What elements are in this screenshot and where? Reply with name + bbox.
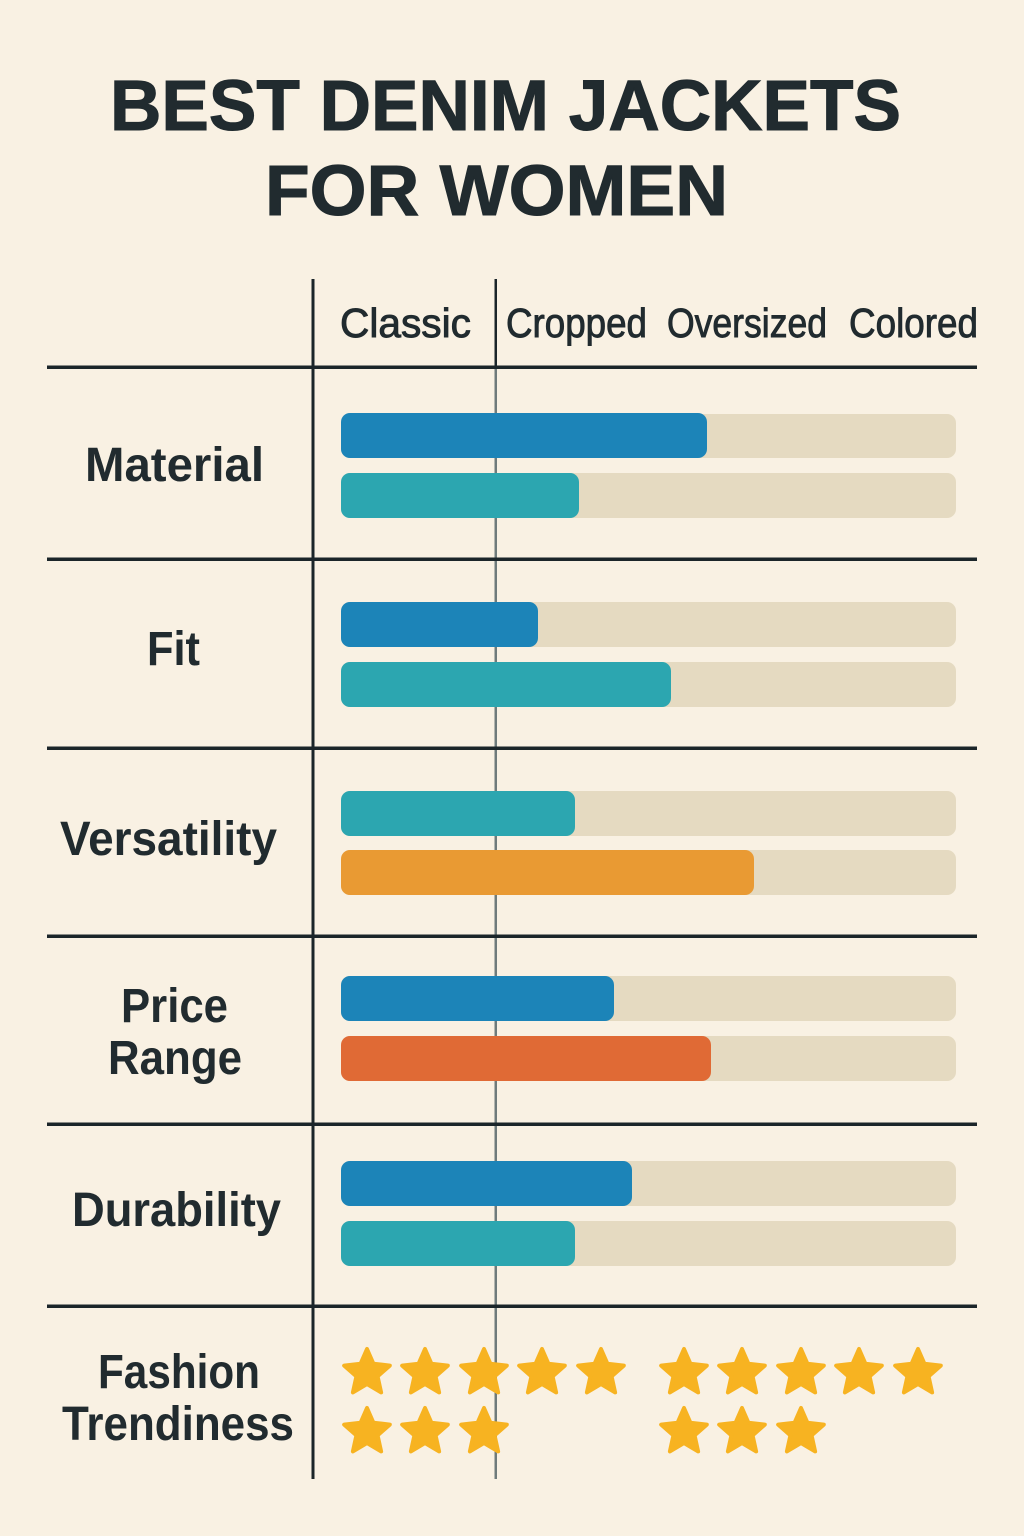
column headers: Cropped	[506, 300, 647, 346]
column headers: Oversized	[667, 300, 827, 346]
row: Material: Material	[85, 439, 264, 492]
row: Price Range: Range	[108, 1032, 242, 1085]
row: Versatility: Versatility	[60, 813, 277, 866]
stars: left rating	[344, 1349, 624, 1451]
row: Price Range: Price	[121, 980, 228, 1033]
row: Versatility	[60, 791, 956, 895]
stars: right rating	[661, 1349, 941, 1451]
row: Material	[85, 413, 956, 518]
row: Fashion Trendiness: Fashion	[98, 1346, 260, 1399]
title: BEST DENIM JACKETS	[110, 67, 901, 146]
row: Price Range	[108, 976, 956, 1085]
column headers	[340, 300, 978, 346]
row: Durability	[72, 1161, 956, 1266]
table grid lines	[47, 279, 977, 1479]
title	[110, 67, 901, 231]
row: Fit	[147, 602, 956, 707]
title: FOR WOMEN	[265, 152, 728, 231]
row: Fit: Fit	[147, 623, 200, 676]
row: Durability: Durability	[72, 1184, 281, 1237]
row: Fashion Trendiness	[62, 1346, 941, 1451]
column headers: Colored	[849, 300, 978, 346]
column headers: Classic	[340, 300, 471, 346]
row: Fashion Trendiness: Trendiness	[62, 1398, 294, 1451]
